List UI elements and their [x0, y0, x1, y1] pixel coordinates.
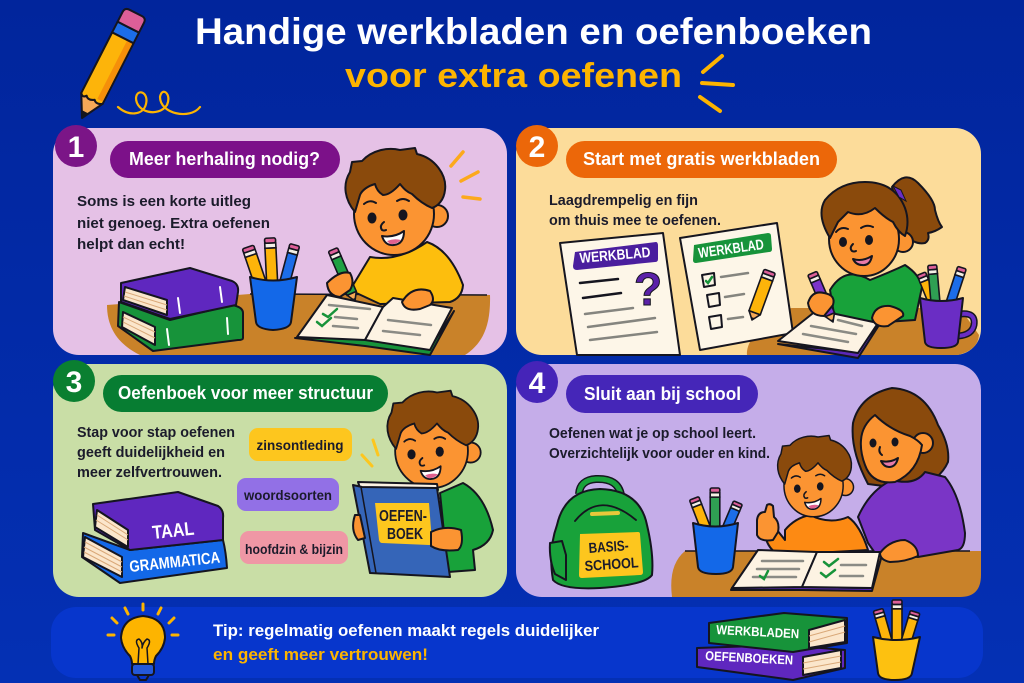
figure: boy writing — [295, 148, 480, 355]
worksheet left: WERKBLAD — [579, 245, 651, 267]
text block 3: geeft duidelijkheid en — [77, 444, 225, 461]
badge 4 — [516, 361, 558, 403]
panel: 1 meer herhaling — [53, 125, 507, 355]
badge 1: 1 — [68, 131, 84, 164]
chip: zinsontleding — [249, 428, 352, 461]
text block 1: niet genoeg. Extra oefenen — [77, 215, 270, 232]
icon: mug with pencils — [917, 265, 974, 348]
spark lines — [451, 152, 480, 199]
text block 1: helpt dan echt! — [77, 236, 185, 253]
book oefenboek: OEFEN- — [379, 508, 427, 525]
text block 3 — [77, 424, 235, 481]
icon: books werkbladen and oefenboeken: WERKBLADEN — [716, 622, 800, 641]
chip: hoofdzin en bijzin — [240, 531, 348, 564]
panel: 4 sluit aan bij school — [516, 361, 981, 597]
heading pill 1: Meer herhaling nodig? — [129, 148, 320, 169]
icon: open book 4 — [731, 550, 882, 591]
tip text — [213, 622, 600, 664]
icon: stacked books TAAL and GRAMMATICA: GRAMMATICA — [129, 550, 221, 576]
tip text: en geeft meer vertrouwen! — [213, 646, 428, 664]
spark lines — [362, 440, 378, 466]
badge 2: 2 — [529, 131, 545, 164]
heading pill 4: Sluit aan bij school — [584, 383, 741, 404]
worksheet right — [680, 223, 793, 350]
icon: stacked books TAAL and GRAMMATICA: TAAL — [151, 519, 196, 544]
book oefenboek: BOEK — [387, 526, 423, 543]
text block 3: Stap voor stap oefenen — [77, 424, 235, 441]
purple pencil — [808, 271, 838, 324]
paper sheet — [778, 310, 881, 358]
icon: stacked books TAAL and GRAMMATICA — [82, 492, 227, 583]
badge 2 — [516, 125, 558, 167]
hand of mother — [880, 540, 918, 562]
icon: light bulb — [108, 604, 178, 680]
icon: books werkbladen and oefenboeken — [697, 613, 847, 680]
text block 4 — [549, 425, 770, 462]
text block 2: om thuis mee te oefenen. — [549, 212, 721, 229]
icon: stacked books 1 — [118, 268, 243, 351]
worksheet left: ? — [634, 263, 662, 315]
badge 3: 3 — [66, 366, 82, 399]
icon: pencil cup 1 — [242, 238, 300, 330]
hand right — [402, 289, 433, 310]
tip text: Tip: regelmatig oefenen maakt regels duidelijker — [213, 622, 600, 640]
chip: woordsoorten: woordsoorten — [243, 487, 332, 503]
chip: hoofdzin en bijzin: hoofdzin & bijzin — [245, 542, 343, 557]
text block 2: Laagdrempelig en fijn — [549, 192, 698, 209]
panel: tip — [51, 600, 983, 680]
text block 1 — [77, 193, 270, 253]
icon: squiggle — [118, 92, 200, 114]
icon: backpack — [550, 479, 652, 588]
icon: books werkbladen and oefenboeken: OEFENBOEKEN — [705, 648, 794, 668]
icon: pencil cup 4 — [689, 488, 742, 574]
worksheet left — [560, 233, 680, 355]
text block 2 — [549, 192, 721, 229]
panel: 2 gratis werkbladen — [516, 125, 981, 358]
green pencil — [328, 248, 360, 303]
icon: title sparks — [700, 56, 733, 111]
badge 4: 4 — [529, 367, 546, 400]
icon: large pencil — [71, 7, 146, 123]
text block 1: Soms is een korte uitleg — [77, 193, 251, 210]
figure: boy thumbs up — [757, 435, 868, 555]
icon: open book 1 — [295, 295, 454, 355]
chip: woordsoorten — [237, 478, 339, 511]
hand left — [327, 272, 352, 297]
book oefenboek — [353, 482, 450, 577]
title: Handige werkbladen en oefenboeken — [195, 11, 872, 52]
hands — [808, 292, 834, 316]
desk 4 — [671, 551, 981, 597]
heading pill 2: Start met gratis werkbladen — [583, 148, 820, 169]
text block 4: Overzichtelijk voor ouder en kind. — [549, 445, 770, 462]
heading pill 3 — [103, 375, 388, 412]
figure: mother — [853, 388, 965, 557]
text block 3: meer zelfvertrouwen. — [77, 464, 222, 481]
icon: backpack: SCHOOL — [584, 555, 639, 575]
desk 1 — [107, 294, 490, 355]
icon: yellow cup with pencils — [873, 600, 920, 680]
figure: boy with oefenboek — [353, 391, 493, 577]
chip: zinsontleding: zinsontleding — [256, 437, 344, 453]
title: voor extra oefenen — [345, 57, 682, 95]
heading pill 4 — [566, 375, 758, 413]
panel: 3 oefenboek — [53, 360, 507, 597]
heading pill 2 — [566, 141, 837, 178]
text block 4: Oefenen wat je op school leert. — [549, 425, 756, 442]
badge 1 — [55, 125, 97, 167]
hands — [353, 515, 365, 540]
icon: backpack: BASIS- — [588, 538, 629, 557]
figure: girl writing — [778, 177, 942, 358]
heading pill 1 — [110, 141, 340, 178]
title — [195, 11, 872, 95]
worksheet right: WERKBLAD — [697, 237, 765, 262]
desk 2 — [747, 308, 979, 355]
badge 3 — [53, 360, 95, 402]
heading pill 3: Oefenboek voor meer structuur — [118, 382, 373, 403]
